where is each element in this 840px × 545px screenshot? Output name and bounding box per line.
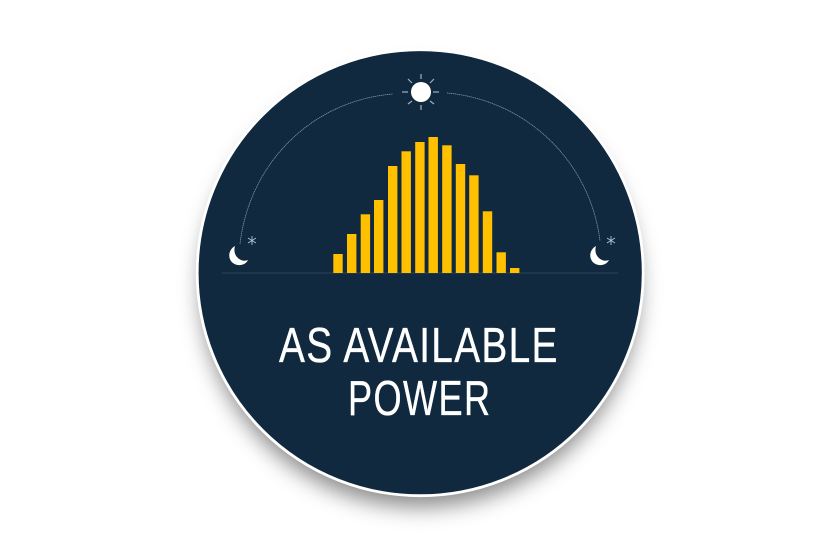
icon: right moon and star	[590, 236, 615, 265]
drop shadow	[201, 69, 639, 507]
title	[279, 319, 559, 426]
title: POWER	[348, 372, 491, 426]
bar chart: daily solar output	[333, 137, 519, 273]
icon: sun	[402, 74, 439, 110]
badge circle	[197, 50, 643, 496]
icon: left moon and star	[229, 236, 256, 265]
sun path arc	[240, 93, 600, 244]
title: AS AVAILABLE	[279, 319, 559, 373]
horizon line	[222, 272, 618, 274]
